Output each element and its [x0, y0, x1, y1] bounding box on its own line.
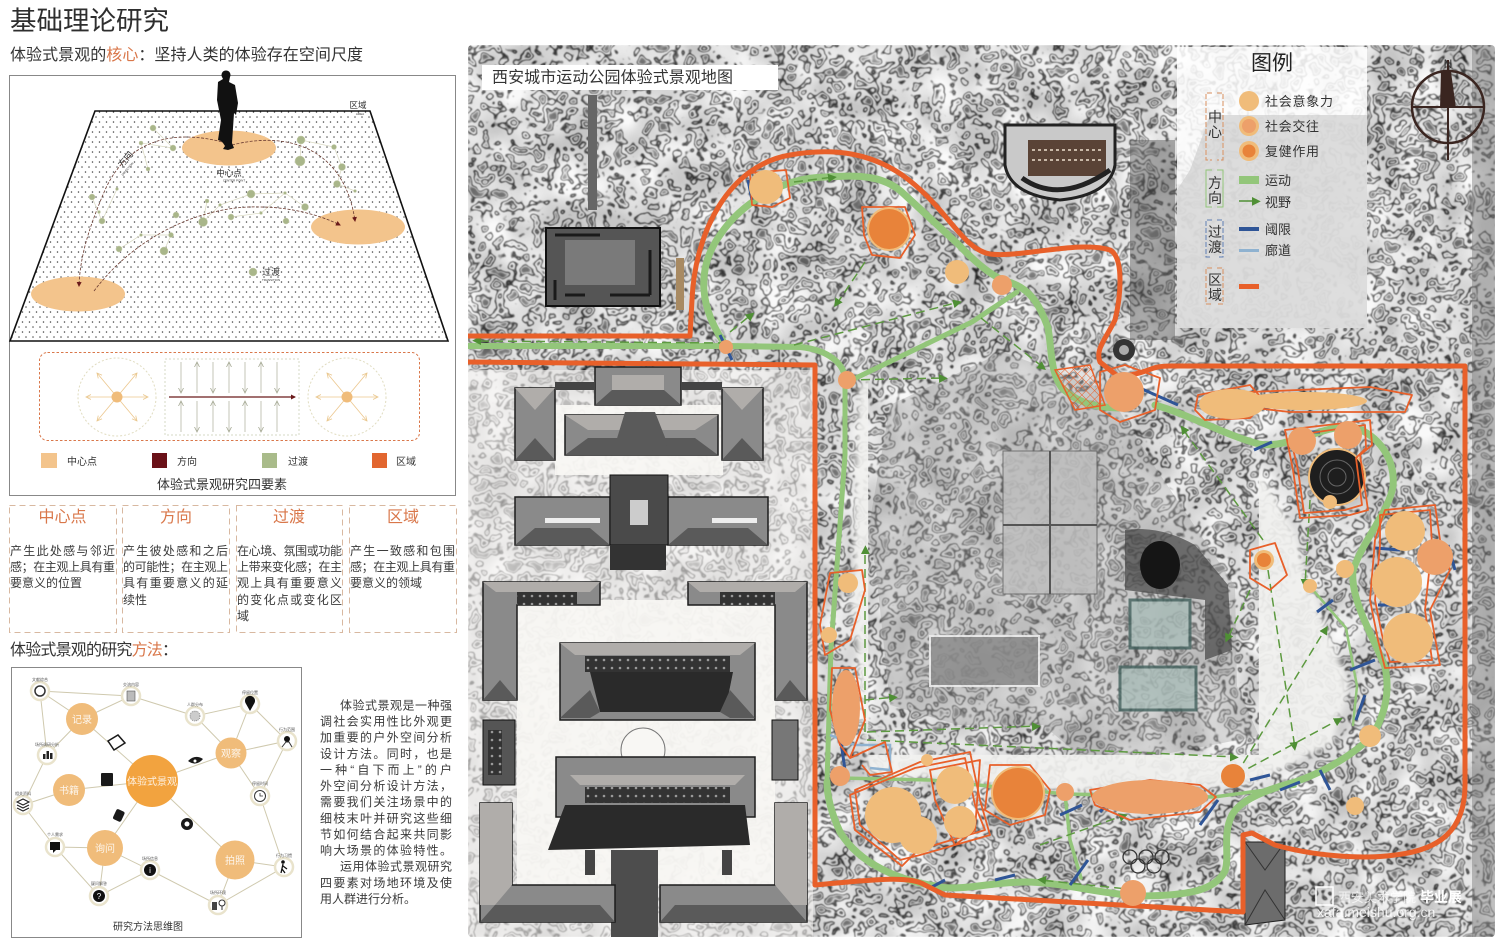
main node: 体验式景观 [127, 775, 177, 788]
column: center point: 感；在主观上具有重 [10, 559, 115, 574]
satellite labels: 场所环境 [210, 889, 226, 895]
main node [126, 755, 178, 807]
column: area: 产生一致感和包围 [350, 543, 455, 558]
mound structures [930, 451, 1232, 710]
upper-left buildings [546, 95, 684, 310]
view direction arrows [475, 177, 1340, 890]
legend group: transition [1206, 220, 1291, 258]
panel: four elements diagram [10, 70, 456, 496]
column: transition: 在心境、氛围或功能 [237, 543, 342, 558]
element legend: 中心点 [67, 455, 97, 468]
legend group: area: 区 [1208, 272, 1222, 288]
map title box: 西安城市运动公园体验式景观地图 [492, 68, 733, 86]
column: direction: 产生彼处感和之后 [123, 543, 228, 558]
element legend: 区域 [396, 455, 416, 468]
center point ellipses [31, 130, 405, 312]
legend group: center [1206, 91, 1333, 161]
column: area: 感；在主观上具有重 [350, 559, 455, 574]
text block: method description: 加重要的户外空间分析 [320, 730, 452, 744]
legend group: transition: 阈限 [1265, 222, 1291, 237]
column: direction: 续性 [123, 593, 147, 607]
experience nodes: rehabilitation [867, 207, 1274, 820]
element schema diagram [40, 352, 420, 440]
legend group: center: 心 [1208, 124, 1222, 140]
column: transition: 的变化点或变化区 [237, 592, 342, 607]
title: 基础理论研究 [10, 6, 169, 36]
satellite labels: 疑问解答 [91, 880, 107, 886]
element legend [41, 453, 416, 468]
legend group: center: 社会交往 [1265, 119, 1319, 134]
column: direction [122, 506, 230, 632]
upper-center stadium building [1005, 125, 1115, 200]
map title box [482, 65, 778, 90]
column: direction: 具有重要意义的延 [123, 575, 228, 590]
satellite labels: 停留位置 [242, 689, 258, 695]
palace courtyards [517, 405, 775, 885]
column: center point [10, 506, 116, 632]
satellite nodes: i [149, 866, 151, 875]
method nodes: 观察 [221, 747, 241, 760]
satellite labels [15, 676, 295, 895]
text block: method description [320, 698, 452, 906]
text block: method description: 运用体验式景观研究 [340, 858, 452, 874]
satellite labels: 场所调研分析 [35, 741, 59, 747]
watermark [1316, 887, 1462, 920]
compass: N [1444, 57, 1452, 71]
method nodes: 记录 [72, 714, 92, 726]
legend group: direction: 视野 [1265, 195, 1291, 210]
plane labels: 过渡 [262, 266, 280, 277]
region outlines [750, 170, 1450, 866]
legend group: transition: 廊道 [1265, 243, 1291, 258]
column: transition [236, 506, 342, 632]
plane labels: DIRECTION [121, 161, 134, 177]
text block: method description: 用人群进行分析。 [320, 892, 416, 906]
diagram caption: 体验式景观研究四要素 [157, 477, 287, 492]
central mound [868, 352, 1259, 755]
text block: method description: 四要素对场地环境及使 [320, 875, 452, 890]
map texture base [468, 45, 1495, 937]
satellite labels: 交流内容 [123, 681, 139, 687]
plane labels: 中心点 [216, 168, 242, 178]
element legend: 方向 [177, 455, 197, 468]
walking routes [468, 176, 1393, 896]
satellite labels: 人群分布 [187, 701, 203, 707]
legend group: center: 社会意象力 [1265, 94, 1333, 109]
text block: method description: 体验式景观是一种强 [340, 698, 452, 712]
satellite labels: 文献综合 [32, 676, 48, 682]
legend group: direction: 向 [1208, 190, 1222, 206]
satellite nodes: ? [97, 892, 102, 901]
olympic rings [1123, 850, 1169, 873]
text block: method description: 需要我们关注场景中的 [320, 794, 452, 809]
satellite labels: 行为习惯 [276, 852, 292, 858]
region boundary [468, 152, 1465, 912]
panel: four element definitions [10, 506, 456, 632]
text block: method description: 一种“自下而上”的户 [320, 762, 452, 777]
palace buildings [480, 367, 807, 937]
legend group: transition: 渡 [1208, 239, 1222, 255]
plane labels [115, 100, 367, 282]
legend group: transition: 过 [1208, 224, 1222, 240]
lower-left palace ground [468, 370, 813, 937]
text block: method description: 细枝末叶并研究这些细 [320, 810, 452, 826]
satellite labels: 场所信息 [142, 855, 158, 861]
legend group: area: 域 [1208, 287, 1222, 303]
legend group: center: 中 [1208, 109, 1222, 125]
column: transition: 观上具有重要意义 [237, 575, 342, 590]
column: area: 要意义的领域 [350, 575, 422, 590]
column: area [350, 506, 456, 632]
legend [1177, 47, 1367, 328]
text block: method description: 调社会实用性比外观更 [320, 714, 452, 728]
right-side structures [1113, 45, 1495, 937]
column: center point: 产生此处感与邻近 [10, 543, 115, 558]
column: direction: 的可能性；在主观上 [123, 559, 228, 574]
icon: standing person [217, 70, 238, 150]
method nodes: 书籍 [59, 784, 79, 797]
method icons [101, 735, 203, 830]
legend group: center: 复健作用 [1265, 144, 1319, 159]
satellite labels: 行为范围 [279, 726, 295, 732]
satellite labels: 个人需求 [47, 831, 63, 837]
legend group: direction: 运动 [1265, 173, 1291, 188]
column: direction: 方向 [160, 508, 192, 526]
plane labels: 区域 [349, 100, 367, 110]
panel: experiential landscape map [468, 45, 1495, 937]
element legend: 过渡 [288, 455, 308, 468]
plane labels: 方向 [115, 148, 135, 169]
satellite labels: 停留时间 [252, 780, 268, 786]
watermark: 西安美术学院 [1338, 890, 1416, 905]
plane labels: AREA [356, 112, 364, 116]
light park ring [852, 360, 1350, 792]
column: center point: 中心点 [38, 508, 87, 526]
watermark: 毕业展 [1420, 889, 1462, 905]
mind map caption: 研究方法思维图 [113, 920, 183, 933]
experience nodes: social interaction [719, 275, 1453, 906]
method nodes [53, 703, 254, 880]
legend group: area [1206, 268, 1259, 304]
watermark: xafa.meishu.org.cn [1317, 904, 1435, 920]
threshold marks [720, 180, 1455, 905]
plane labels: CENTER POINT [223, 178, 245, 182]
panel: research method mind map [12, 668, 302, 938]
text block: method description: 外空间分析设计方法， [320, 778, 452, 793]
legend group: direction [1206, 170, 1291, 210]
direction arcs [79, 137, 355, 291]
text block: method description: 设计方法。同时，也是 [320, 746, 452, 761]
compass [1412, 57, 1484, 160]
heading: research method: 体验式景观的研究方法： [10, 641, 178, 659]
column: transition: 过渡 [273, 508, 305, 526]
legend group: direction: 方 [1208, 175, 1222, 191]
method nodes: 拍照 [225, 854, 245, 867]
legend title: 图例 [1251, 52, 1293, 75]
pond [1308, 448, 1366, 506]
column: center point: 要意义的位置 [10, 575, 82, 590]
connecting lines [23, 691, 287, 905]
text block: method description: 节如何结合起来共同影 [320, 826, 452, 842]
column: area: 区域 [387, 508, 419, 526]
satellite labels: 相关资料 [15, 790, 31, 796]
heading: experiential landscape core: 体验式景观的核心：坚持人类的体验存在空间尺度 [10, 46, 363, 64]
area plane with dot pattern [10, 111, 448, 341]
column: transition: 上带来变化感；在主 [237, 559, 342, 574]
text block: method description: 响大场景的体验特性。 [320, 842, 452, 858]
experience nodes: social imagination [749, 170, 1433, 854]
transition nodes [89, 125, 356, 276]
satellite nodes [14, 682, 296, 914]
plane labels: TRANSITION [262, 278, 280, 282]
method nodes: 询问 [95, 842, 115, 855]
column: transition: 域 [237, 609, 249, 623]
